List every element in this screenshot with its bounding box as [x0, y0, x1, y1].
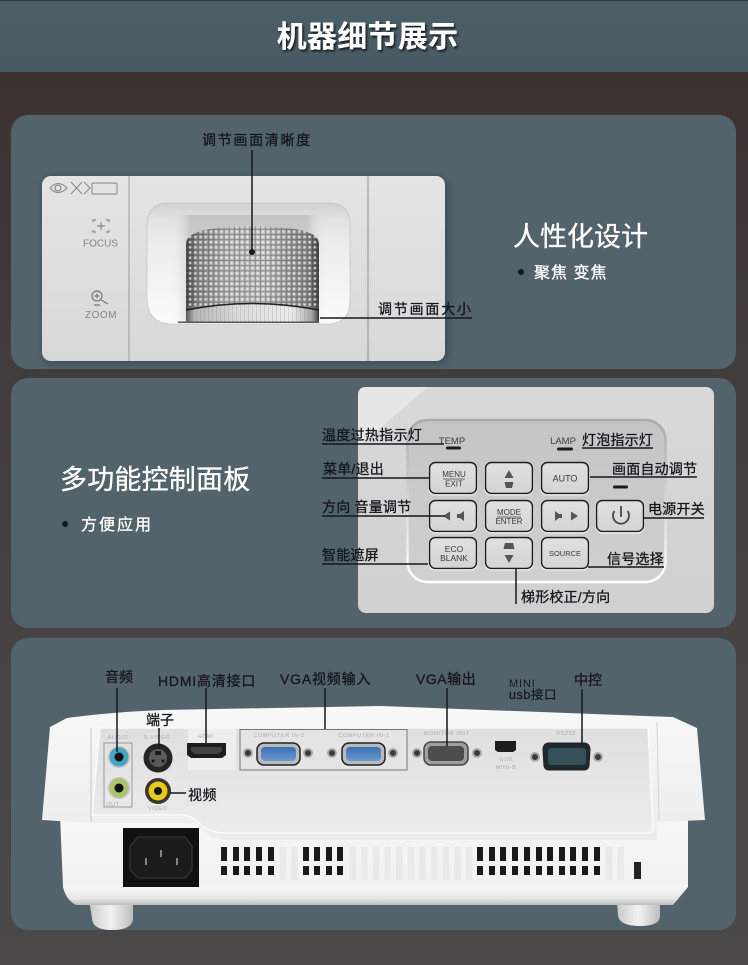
RS232 port: [543, 743, 590, 770]
port captions: S-VIDEO: [144, 735, 171, 741]
callout: audio: 音频: [105, 669, 133, 685]
bullet: easy to use: 方便应用: [81, 515, 153, 534]
security lock slot: [634, 862, 641, 879]
callout: smart blank: 智能遮屏: [322, 547, 379, 563]
ghost vent slots: [279, 847, 624, 880]
panel: control panel: [11, 378, 736, 628]
callout: direction and volume: 方向 音量调节: [322, 499, 411, 515]
photo: lens control plate: [42, 176, 445, 361]
photo: projector rear: [42, 706, 705, 930]
port captions: USB: [499, 757, 513, 763]
callout: mini USB: [509, 678, 557, 702]
vents: [221, 847, 600, 875]
port captions: VIDEO: [148, 806, 168, 812]
callout: mini USB: MINI: [509, 678, 535, 690]
callout: mini USB: usb接口: [509, 687, 557, 702]
label: TEMP: TEMP: [439, 436, 465, 447]
callout: menu exit: [322, 461, 429, 478]
photo: keypad: [358, 387, 714, 613]
callout: sharpness: 调节画面清晰度: [202, 132, 312, 148]
button labels: [440, 470, 581, 563]
callout: S-Video terminal: [146, 712, 174, 748]
bullet: focus and zoom: 聚焦 变焦: [534, 264, 607, 282]
callout: RS232 control: 中控: [574, 672, 602, 688]
port captions: RS232: [556, 731, 576, 737]
button labels: SOURCE: [549, 549, 581, 558]
heading: multifunction control panel: 多功能控制面板: [60, 465, 250, 495]
upper body: [42, 706, 705, 840]
callout: keystone: [516, 569, 610, 605]
button labels: BLANK: [440, 553, 468, 563]
label: FOCUS: FOCUS: [83, 238, 118, 250]
callout: direction and volume: [322, 499, 445, 516]
LED lights: [446, 446, 628, 488]
callout: VGA input: VGA视频输入: [280, 671, 371, 687]
label: ZOOM: ZOOM: [85, 310, 117, 321]
audio ports: [108, 746, 130, 799]
callout: smart blank: [322, 547, 428, 564]
button labels: ENTER: [495, 517, 523, 526]
port captions: MINI-B: [496, 765, 516, 771]
rear inset panel: [92, 728, 653, 833]
port captions: OUT: [106, 802, 120, 808]
callout: temperature light: 温度过热指示灯: [322, 427, 422, 443]
port captions: AUDIO: [108, 735, 128, 741]
callout: source select: 信号选择: [607, 551, 664, 567]
callout: auto adjust: 画面自动调节: [612, 461, 697, 477]
button labels: AUTO: [553, 474, 577, 484]
VGA ports: [257, 742, 468, 765]
port captions: [106, 731, 576, 812]
callout: HDMI: HDMI高清接口: [158, 673, 256, 689]
mini USB port: [495, 741, 516, 752]
callout: keystone: 梯形校正/方向: [521, 589, 610, 605]
screw holes: [244, 749, 602, 761]
feet: [89, 900, 660, 930]
title: 机器细节展示: [277, 21, 458, 54]
buttons: [430, 462, 644, 568]
button labels: EXIT: [445, 480, 463, 488]
power socket: [123, 828, 199, 887]
icon: eye, X and projector: [50, 182, 117, 194]
panel: ports: [11, 638, 736, 930]
callout: VGA input: [280, 671, 371, 729]
button labels: MENU: [442, 470, 466, 479]
port captions: COMPUTER IN-1: [338, 733, 390, 739]
S-Video port: [144, 744, 172, 772]
callout: power switch: 电源开关: [648, 501, 705, 517]
heading: humanized design: 人性化设计: [513, 222, 648, 252]
callout: VGA output: [416, 671, 476, 746]
callout: menu exit: 菜单/退出: [323, 461, 384, 477]
port captions: HDMI: [198, 734, 214, 740]
port captions: MONITOR-OUT: [424, 731, 470, 737]
composite video port: [145, 778, 171, 804]
HDMI port: [187, 743, 226, 758]
button labels: ECO: [445, 544, 464, 554]
icon: power button: [613, 506, 629, 524]
header banner: [0, 0, 748, 72]
callout: image size: 调节画面大小: [378, 301, 473, 317]
icon: zoom: [92, 291, 108, 305]
callout: composite video: [170, 787, 217, 803]
callout: RS232 control: [574, 672, 602, 745]
port captions: COMPUTER IN-2: [253, 733, 305, 739]
lower body: [60, 815, 688, 905]
callout: composite video: 视频: [188, 787, 217, 803]
callout: sharpness: [202, 132, 312, 255]
callout: audio: [105, 669, 133, 752]
callout: VGA output: VGA输出: [416, 671, 476, 687]
callout: lamp light: 灯泡指示灯: [582, 432, 653, 448]
label: LAMP: LAMP: [550, 436, 576, 447]
button icons: [443, 470, 578, 563]
panel: focus and zoom design: [11, 115, 736, 369]
icon: focus: [93, 220, 109, 232]
callout: S-Video terminal: 端子: [146, 712, 174, 728]
button labels: MODE: [497, 508, 521, 517]
callout: HDMI: [158, 673, 256, 743]
